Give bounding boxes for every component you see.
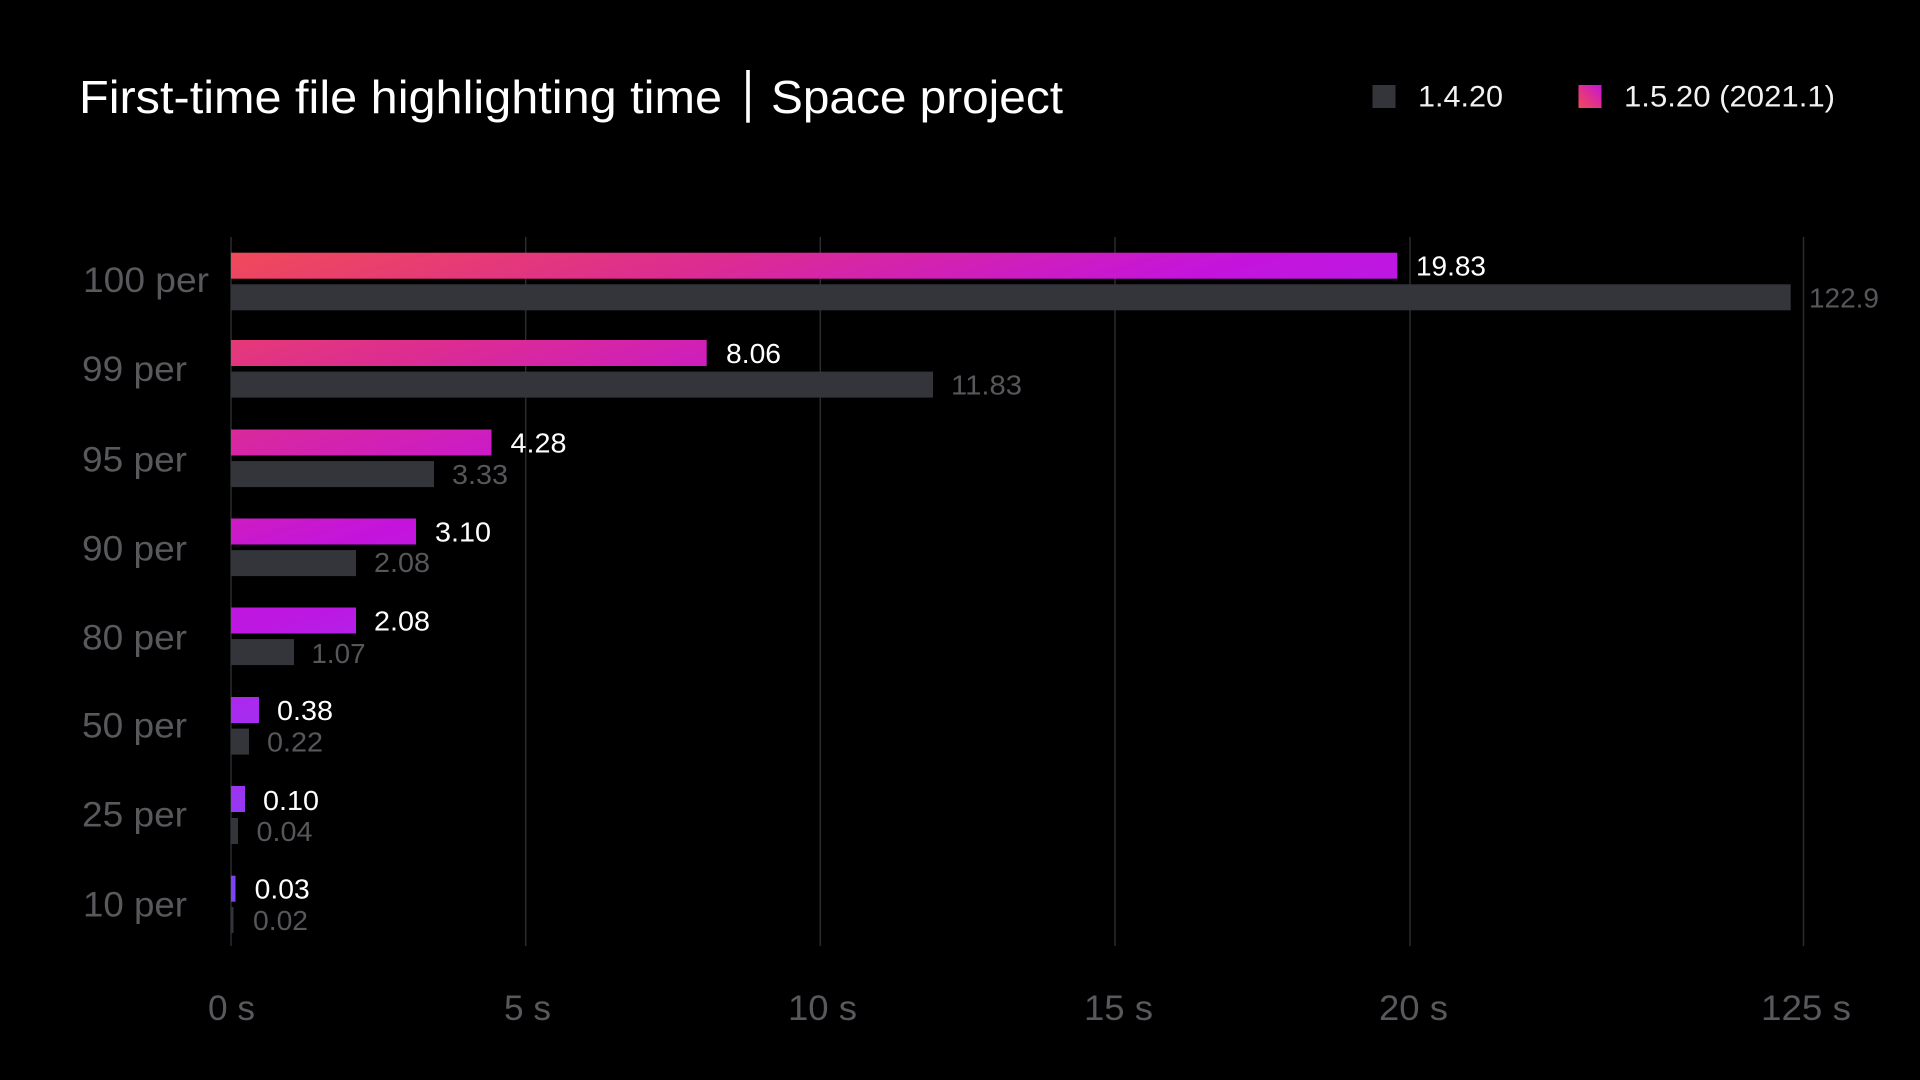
row: 90 per: 2.08 <box>374 547 430 578</box>
row: 50 per: 0.38 <box>277 695 333 726</box>
title: First-time file highlighting time <box>79 71 722 123</box>
row: 90 per <box>82 516 491 578</box>
legend item: 1.4.20 <box>1372 80 1503 114</box>
title <box>79 70 1063 123</box>
row: 99 per: 8.06 <box>726 338 781 369</box>
row: 99 per: 99 per <box>82 350 187 389</box>
legend item: 1.4.20: 1.4.20 <box>1418 80 1503 114</box>
row: 10 per <box>83 874 310 936</box>
row: 100 per <box>83 251 1879 313</box>
row: 25 per <box>82 785 319 847</box>
row: 95 per: 4.28 <box>510 428 566 458</box>
row: 99 per <box>82 338 1022 401</box>
row: 95 per <box>82 428 566 490</box>
row: 10 per: 0.02 <box>253 905 308 936</box>
row: 50 per <box>82 695 333 758</box>
x axis labels: 125 s <box>1761 989 1851 1028</box>
row: 80 per <box>82 606 430 669</box>
row: 90 per: 90 per <box>82 529 187 568</box>
row: 90 per: 3.10 <box>435 516 491 548</box>
row: 25 per: 0.04 <box>256 816 312 847</box>
row: 25 per: 0.10 <box>263 785 319 816</box>
title: Space project <box>771 71 1063 123</box>
row: 25 per: 25 per <box>82 796 187 834</box>
x axis labels: 10 s <box>788 989 857 1028</box>
row: 80 per: 80 per <box>82 618 187 657</box>
x axis labels: 20 s <box>1379 989 1448 1028</box>
row: 10 per: 0.03 <box>255 874 310 905</box>
row: 95 per: 3.33 <box>452 459 508 490</box>
x axis labels: 15 s <box>1084 989 1153 1028</box>
x axis labels: 0 s <box>208 989 255 1028</box>
row: 100 per: 122.9 <box>1809 282 1879 313</box>
x axis labels: 5 s <box>504 989 551 1028</box>
row: 10 per: 10 per <box>83 886 187 924</box>
legend <box>1372 80 1835 114</box>
legend item: 1.5.20 (2021.1): 1.5.20 (2021.1) <box>1624 80 1835 114</box>
row: 100 per: 19.83 <box>1416 251 1486 282</box>
bar chart <box>82 251 1879 936</box>
row: 80 per: 2.08 <box>374 606 430 636</box>
row: 100 per: 100 per <box>83 261 209 300</box>
x axis labels <box>208 989 1851 1028</box>
row: 50 per: 0.22 <box>267 727 323 758</box>
row: 95 per: 95 per <box>82 440 187 479</box>
row: 99 per: 11.83 <box>951 370 1022 401</box>
row: 80 per: 1.07 <box>312 638 366 669</box>
row: 50 per: 50 per <box>82 706 187 746</box>
